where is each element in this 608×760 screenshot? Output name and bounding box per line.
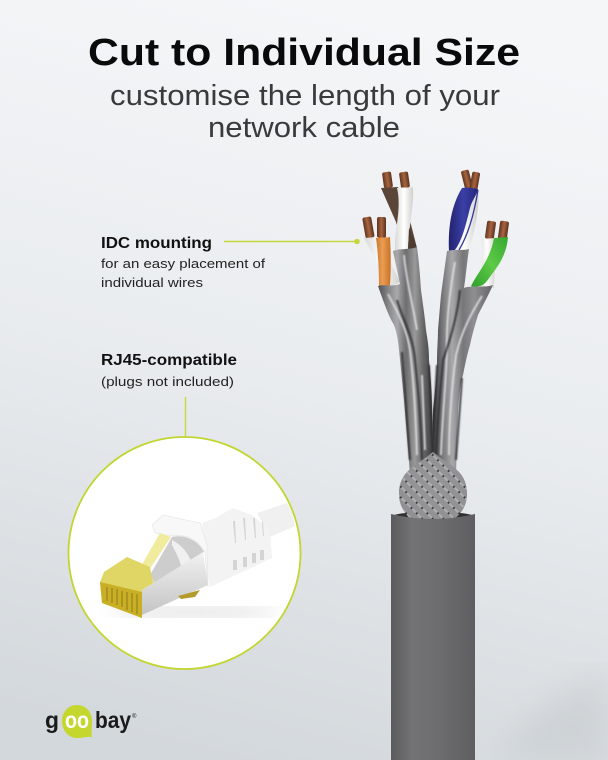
callout: RJ45-compatible: (plugs not included)	[101, 374, 234, 389]
outer jacket	[391, 514, 475, 760]
cable stub	[257, 503, 295, 537]
callout: RJ45-compatible: RJ45-compatible	[101, 352, 237, 369]
wire pair: brown and white	[381, 171, 417, 252]
wire pair: green and white	[471, 221, 509, 288]
braided shield	[399, 452, 467, 522]
subtitle: network cable	[208, 112, 400, 144]
foil highlights	[388, 255, 482, 455]
wire pair: blue and white	[449, 169, 480, 252]
title: Cut to Individual Size	[88, 32, 520, 74]
plug shadow	[110, 607, 280, 617]
subtitle: customise the length of your	[110, 80, 500, 112]
subtitle	[110, 80, 500, 144]
boot hood	[152, 515, 208, 587]
gold connector	[100, 557, 153, 618]
gold clip	[130, 533, 171, 585]
jacket rear rim	[393, 512, 473, 520]
foil-shielded bundles	[378, 247, 493, 474]
inset circle: RJ45 plug	[68, 437, 300, 669]
rib boot	[202, 508, 272, 587]
logo: goobay: oo	[65, 707, 89, 733]
callout: IDC mounting: individual wires	[101, 275, 204, 290]
logo: goobay: g	[45, 707, 59, 733]
network cable	[362, 169, 509, 760]
wire pair: orange and white	[362, 216, 400, 287]
logo: goobay: bay	[95, 707, 131, 733]
metal shield	[142, 552, 208, 615]
cable shadow on floor	[500, 672, 608, 760]
callout: RJ45-compatible	[101, 352, 237, 437]
shield interior	[150, 536, 204, 585]
callout: IDC mounting	[101, 235, 360, 290]
callout: IDC mounting: IDC mounting	[101, 235, 212, 252]
callout: IDC mounting: for an easy placement of	[101, 256, 265, 271]
logo: goobay	[45, 705, 137, 738]
logo: goobay: ®	[132, 713, 137, 720]
